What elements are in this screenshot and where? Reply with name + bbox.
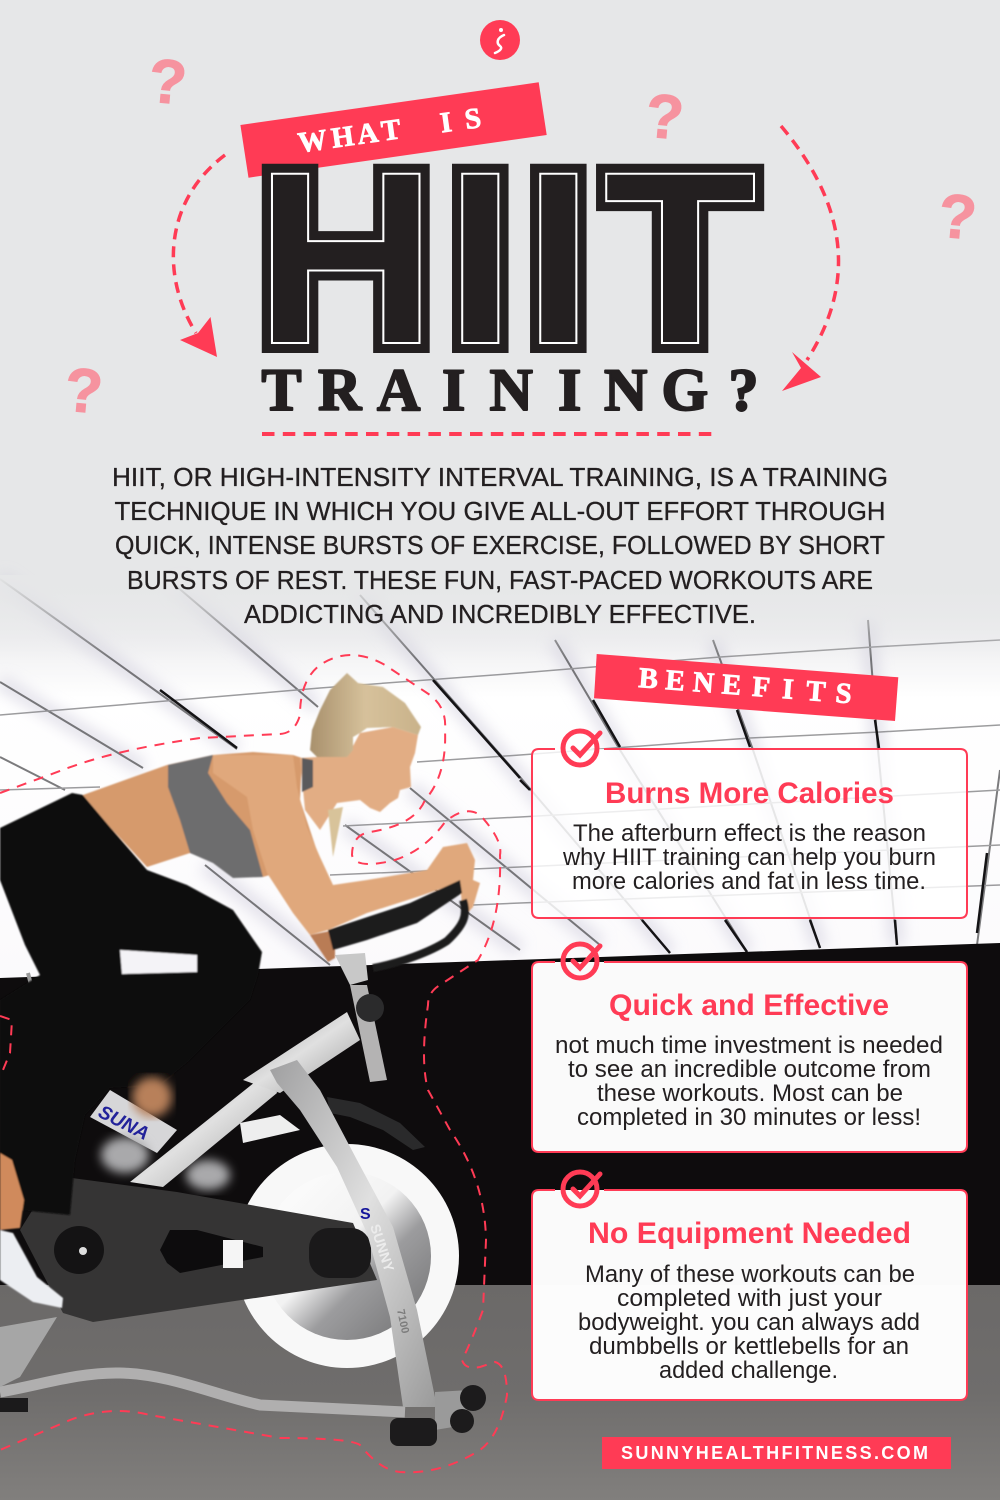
front foot and wheels <box>390 1385 486 1446</box>
card text: not much time investment is needed <box>555 1032 943 1059</box>
card: quick and effective <box>532 944 967 1152</box>
arm <box>213 755 480 935</box>
logo icon <box>480 20 520 60</box>
fender <box>327 1097 425 1150</box>
rear frame bar <box>28 973 52 1100</box>
card: burns more calories <box>532 731 967 918</box>
seat stem <box>335 953 387 1082</box>
fork label: S <box>360 1206 371 1223</box>
banner: what is: WHAT IS <box>296 102 483 159</box>
question mark: ? <box>146 46 189 119</box>
card text: completed in 30 minutes or less! <box>577 1104 921 1131</box>
intro paragraph: TECHNIQUE IN WHICH YOU GIVE ALL-OUT EFFORT THROUGH <box>114 496 886 526</box>
dashed outline around rider <box>0 655 507 1472</box>
intro paragraph <box>112 462 888 629</box>
neck and face <box>300 727 418 830</box>
card text: completed with just your <box>617 1285 882 1312</box>
website footer badge: SUNNYHEALTHFITNESS.COM <box>621 1443 928 1463</box>
card text: more calories and fat in less time. <box>572 868 926 895</box>
head tube <box>243 1012 360 1093</box>
brand label: SUNA: SUNA <box>95 1102 152 1145</box>
ankle <box>0 1153 24 1230</box>
down tube <box>130 1070 277 1187</box>
card box <box>532 962 967 1152</box>
website footer badge <box>602 1437 951 1469</box>
rider <box>0 673 480 1308</box>
torso <box>83 752 320 877</box>
fork label <box>360 1206 411 1335</box>
card heading: Burns More Calories <box>605 777 894 810</box>
card text: these workouts. Most can be <box>597 1080 903 1107</box>
card: no equipment needed <box>532 1172 967 1400</box>
rear left frame <box>0 1317 57 1387</box>
card text <box>578 1261 920 1384</box>
white shoe <box>0 1230 63 1308</box>
fork label: 7100 <box>394 1308 411 1335</box>
title: training: TRAINING? <box>262 357 758 423</box>
gym photo background <box>0 575 1000 1500</box>
banner: benefits <box>594 654 898 721</box>
banner: benefits: BENEFITS <box>637 662 853 710</box>
card text <box>555 1032 943 1131</box>
card text: to see an incredible outcome from <box>568 1056 931 1083</box>
question mark: ? <box>643 81 686 154</box>
blond strand <box>328 807 343 857</box>
title underline <box>262 432 712 436</box>
check icon <box>563 944 600 978</box>
seat post tube <box>90 1090 177 1153</box>
intro paragraph: BURSTS OF REST. THESE FUN, FAST-PACED WORKOUTS ARE <box>127 565 873 595</box>
fork label: SUNNY <box>367 1222 398 1274</box>
white clip <box>66 1135 78 1142</box>
handlebar <box>328 880 465 968</box>
rear foot <box>0 1398 28 1412</box>
right arrow <box>781 126 839 391</box>
card text: bodyweight. you can always add <box>578 1309 920 1336</box>
knob <box>356 994 384 1022</box>
blurred shoe behind <box>101 1137 230 1190</box>
card heading: Quick and Effective <box>609 989 889 1022</box>
card text <box>562 820 936 895</box>
card box <box>532 1190 967 1400</box>
sports bra <box>168 755 263 878</box>
ceiling gap between legs <box>120 950 197 974</box>
chain guard <box>20 1178 377 1322</box>
card text: dumbbells or kettlebells for an <box>589 1333 909 1360</box>
intro paragraph: HIIT, OR HIGH-INTENSITY INTERVAL TRAINING, IS A TRAINING <box>112 462 888 492</box>
intro paragraph: QUICK, INTENSE BURSTS OF EXERCISE, FOLLOWED BY SHORT <box>115 530 885 560</box>
question mark: ? <box>936 181 979 253</box>
card text: The afterburn effect is the reason <box>573 820 926 847</box>
leggings <box>0 793 262 1215</box>
rear stabilizer base <box>0 1373 405 1412</box>
card text: added challenge. <box>659 1357 838 1384</box>
bra strap <box>302 758 313 792</box>
question mark: ? <box>62 355 105 428</box>
title: HIIT: HIIT <box>255 120 757 395</box>
check icon <box>563 1172 600 1206</box>
front fork <box>270 1060 437 1407</box>
banner: what is <box>240 82 547 178</box>
left arrow <box>173 155 225 357</box>
hair <box>310 673 421 757</box>
title: HIIT: HIIT <box>255 120 757 395</box>
calf blur <box>132 1077 172 1117</box>
white bracket <box>240 1115 300 1143</box>
card text: Many of these workouts can be <box>585 1261 915 1288</box>
flywheel <box>235 1144 459 1368</box>
other arm <box>310 930 335 962</box>
card heading: No Equipment Needed <box>588 1217 911 1250</box>
card text: why HIIT training can help you burn <box>562 844 936 871</box>
intro paragraph: ADDICTING AND INCREDIBLY EFFECTIVE. <box>244 599 756 629</box>
check icon <box>563 731 600 765</box>
card box <box>532 749 967 918</box>
exercise bike <box>0 953 486 1446</box>
